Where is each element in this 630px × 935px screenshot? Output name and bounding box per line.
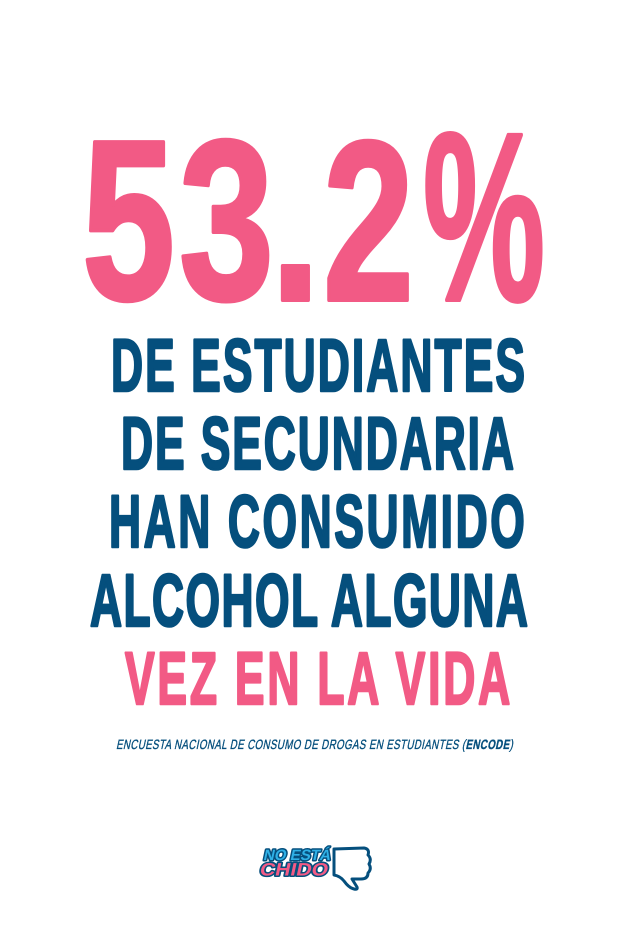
line: de secundaria: DE SECUNDARIA xyxy=(121,402,514,485)
logo text: chido: CHIDO xyxy=(258,860,330,879)
big statistic: 53.2%: 2 xyxy=(323,95,414,349)
big statistic: 53.2% xyxy=(82,83,545,351)
big statistic: 53.2%: 3 xyxy=(179,94,274,348)
big statistic: 53.2%: . xyxy=(270,95,321,349)
line: han consumido: HAN CONSUMIDO xyxy=(109,480,525,563)
source note: ENCUESTA NACIONAL DE CONSUMO DE DROGAS EN ESTUDIANTES (ENCODE) xyxy=(115,737,515,752)
big statistic: 53.2%: 5 xyxy=(82,94,175,348)
highlighted line: vez en la vida: VEZ EN LA VIDA xyxy=(125,637,510,720)
logo text: no está: NO ESTÁ xyxy=(262,847,333,864)
logo: no está chido xyxy=(258,847,370,889)
icon: thumbs down xyxy=(334,848,370,889)
line: de estudiantes: DE ESTUDIANTES xyxy=(111,324,525,407)
headline text xyxy=(90,324,528,642)
line: alcohol alguna: ALCOHOL ALGUNA xyxy=(90,559,528,642)
